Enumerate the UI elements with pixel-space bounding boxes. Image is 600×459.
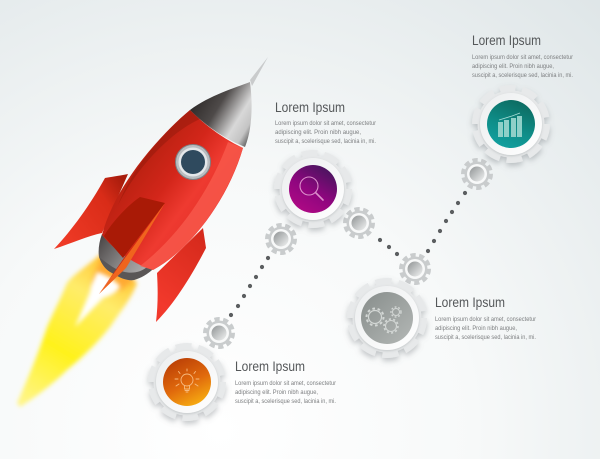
step 4: teal chart gear	[476, 89, 546, 159]
engine nozzle	[99, 234, 153, 280]
step 3: grey settings gear	[351, 282, 423, 354]
text block: step 4: Lorem ipsum dolor sit amet, consectetur	[472, 54, 574, 61]
icon: magnifier	[300, 177, 323, 200]
white ring	[480, 93, 542, 155]
text block: step 2: suscipit a, scelerisque sed, lacinia in, mi.	[275, 138, 376, 145]
text block: step 4: Lorem Ipsum	[472, 32, 541, 48]
small gear 2	[268, 226, 294, 252]
text block: step 4	[472, 32, 574, 79]
text block: step 2: adipiscing elit. Proin nibh augue,	[275, 129, 361, 136]
right fin	[156, 228, 206, 322]
small gear 1	[206, 320, 232, 346]
small gear 5	[464, 160, 490, 188]
gear base	[152, 347, 222, 417]
orange disc	[163, 358, 211, 406]
grey disc	[361, 292, 413, 344]
text block: step 1: Lorem ipsum dolor sit amet, consectetur	[235, 380, 337, 387]
text block: step 3	[435, 294, 537, 341]
text block: step 1: Lorem Ipsum	[235, 358, 305, 374]
text block: step 1: adipiscing elit. Proin nibh augue,	[235, 389, 318, 396]
dotted path: upper segment	[426, 191, 467, 253]
text block: step 4: adipiscing elit. Proin nibh augue,	[472, 63, 554, 70]
text block: step 1	[235, 358, 337, 405]
icon: three cogs	[366, 307, 401, 333]
small gear 3	[346, 210, 372, 236]
porthole window	[176, 144, 210, 180]
gear base	[351, 282, 423, 354]
icon: light bulb	[175, 369, 199, 392]
icon: bar chart	[498, 113, 522, 137]
text block: step 1: suscipit a, scelerisque sed, lacinia in, mi.	[235, 398, 336, 405]
rocket illustration	[17, 57, 268, 407]
rocket body	[102, 110, 243, 270]
small gear 4	[402, 256, 428, 282]
white ring	[156, 351, 218, 413]
text block: step 2	[275, 99, 377, 145]
text block: step 3: adipiscing elit. Proin nibh augue,	[435, 325, 517, 332]
purple disc	[289, 165, 337, 213]
dotted path: lower segment	[229, 256, 270, 317]
text block: step 4: suscipit a, scelerisque sed, lacinia in, mi.	[472, 72, 573, 79]
step 2: purple search gear	[278, 154, 348, 224]
text block: step 3: suscipit a, scelerisque sed, lacinia in, mi.	[435, 334, 536, 341]
centre fin	[99, 197, 165, 294]
nose cone	[190, 57, 268, 147]
text block: step 3: Lorem ipsum dolor sit amet, consectetur	[435, 316, 537, 323]
text block: step 3: Lorem Ipsum	[435, 294, 505, 310]
left fin	[54, 174, 128, 249]
step 1: orange idea gear	[152, 347, 222, 417]
dotted path: middle segment	[378, 238, 399, 256]
text block: step 2: Lorem ipsum dolor sit amet, consectetur	[275, 120, 377, 127]
gear base	[476, 89, 546, 159]
white ring	[355, 286, 419, 350]
gear base	[278, 154, 348, 224]
flame	[17, 255, 137, 407]
white ring	[282, 158, 344, 220]
teal disc	[487, 100, 535, 148]
text block: step 2: Lorem Ipsum	[275, 99, 345, 115]
